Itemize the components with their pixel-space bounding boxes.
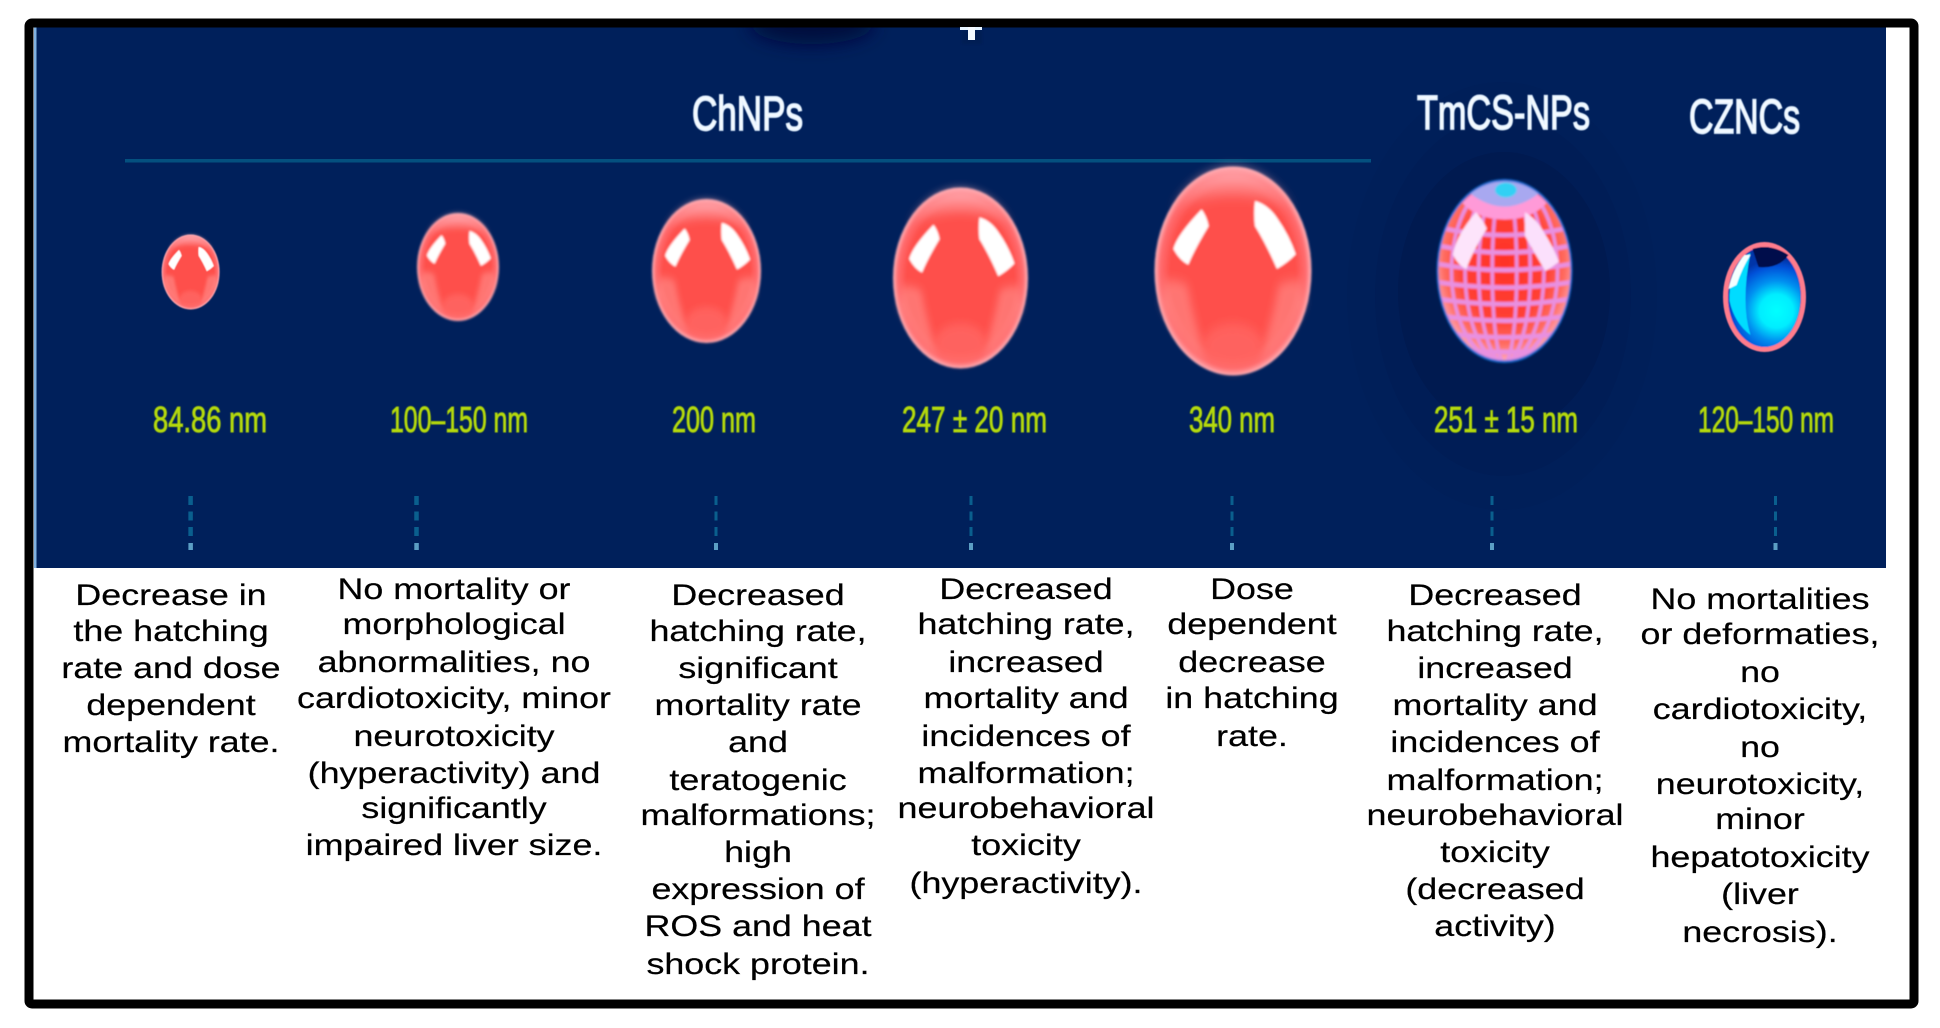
- size label: 100-150 nm: 100–150 nm: [390, 399, 528, 440]
- text: effects of 340 nm ChNPs: in hatching: [1165, 681, 1339, 714]
- text: effects of 84.86 nm ChNPs: [61, 578, 281, 758]
- text: effects of CZNCs: no: [1740, 655, 1780, 688]
- icon: core-shell nanoparticle CZNCs: [1726, 244, 1804, 350]
- text: effects of 100-150 nm ChNPs: neurotoxicity: [353, 719, 555, 752]
- text: effects of 100-150 nm ChNPs: (hyperactivity) and: [308, 756, 600, 789]
- text: effects of 247 nm ChNPs: [898, 572, 1154, 899]
- text: effects of TmCS-NPs: mortality and: [1392, 688, 1598, 721]
- text: effects of TmCS-NPs: increased: [1417, 651, 1573, 684]
- size label: 120-150 nm: 120–150 nm: [1698, 399, 1834, 440]
- text: effects of 100-150 nm ChNPs: abnormalities, no: [318, 645, 590, 678]
- text: effects of 340 nm ChNPs: Dose: [1210, 572, 1294, 605]
- size label: 84.86 nm: 84.86 nm: [153, 399, 267, 440]
- text: effects of CZNCs: no: [1740, 730, 1780, 763]
- text: effects of TmCS-NPs: incidences of: [1390, 725, 1601, 758]
- text: effects of 200 nm ChNPs: expression of: [651, 872, 866, 905]
- text: effects of 247 nm ChNPs: mortality and: [923, 681, 1129, 714]
- text: effects of 100-150 nm ChNPs: impaired liver size.: [306, 828, 602, 861]
- text: effects of 200 nm ChNPs: high: [724, 835, 792, 868]
- text: effects of 247 nm ChNPs: hatching rate,: [917, 607, 1135, 640]
- text: effects of 247 nm ChNPs: neurobehavioral: [898, 791, 1154, 824]
- text: effects of 247 nm ChNPs: toxicity: [971, 828, 1081, 861]
- icon: meshed nanoparticle TmCS-NPs: [1436, 179, 1572, 363]
- text: effects of 200 nm ChNPs: hatching rate,: [649, 614, 867, 647]
- text: effects of 200 nm ChNPs: significant: [678, 651, 838, 684]
- text: effects of TmCS-NPs: activity): [1434, 909, 1556, 942]
- text: effects of 200 nm ChNPs: Decreased: [671, 578, 845, 611]
- text: effects of 247 nm ChNPs: increased: [948, 645, 1104, 678]
- text: effects of CZNCs: neurotoxicity,: [1656, 767, 1864, 800]
- text: effects of CZNCs: hepatotoxicity: [1650, 840, 1870, 873]
- text: effects of 84.86 nm ChNPs: dependent: [86, 688, 256, 721]
- text: effects of CZNCs: or deformaties,: [1641, 617, 1879, 650]
- text: effects of 100-150 nm ChNPs: morphological: [342, 607, 566, 640]
- text: effects of 247 nm ChNPs: Decreased: [939, 572, 1113, 605]
- text: effects of 340 nm ChNPs: decrease: [1178, 645, 1326, 678]
- icon: red nanoparticle 84.86 nm: [162, 234, 220, 310]
- text: effects of CZNCs: [1641, 582, 1879, 948]
- size label: 251 ± 15 nm: 251 ± 15 nm: [1434, 399, 1578, 440]
- icon: red nanoparticle 200 nm: [652, 199, 761, 343]
- size label: 200 nm: 200 nm: [672, 399, 756, 440]
- text: effects of 200 nm ChNPs: mortality rate: [654, 688, 862, 721]
- text: effects of 340 nm ChNPs: dependent: [1167, 607, 1337, 640]
- icon: red nanoparticle 340 nm: [1154, 166, 1312, 376]
- text: effects of 200 nm ChNPs: teratogenic: [669, 763, 847, 796]
- text: effects of TmCS-NPs: Decreased: [1408, 578, 1582, 611]
- dotted connector lines: [188, 496, 1777, 550]
- text: effects of 100-150 nm ChNPs: significantly: [361, 791, 547, 824]
- heading: CZNCs: CZNCs: [1689, 91, 1800, 144]
- icon: red nanoparticle 247 nm: [893, 188, 1028, 368]
- text: effects of 340 nm ChNPs: rate.: [1216, 719, 1288, 752]
- text: effects of CZNCs: necrosis).: [1682, 915, 1838, 948]
- text: effects of TmCS-NPs: neurobehavioral: [1367, 798, 1623, 831]
- text: effects of 200 nm ChNPs: and: [728, 725, 788, 758]
- text: effects of 84.86 nm ChNPs: mortality rate.: [62, 725, 280, 758]
- size label: 247 ± 20 nm: 247 ± 20 nm: [902, 399, 1047, 440]
- heading: TmCS-NPs: TmCS-NPs: [1417, 87, 1590, 140]
- text: effects of 100-150 nm ChNPs: No mortality or: [338, 572, 571, 605]
- panel: navy nanoparticle band: [34, 4, 1886, 568]
- text: effects of TmCS-NPs: (decreased: [1405, 872, 1585, 905]
- text: effects of 84.86 nm ChNPs: rate and dose: [61, 651, 281, 684]
- heading: ChNPs: ChNPs: [692, 88, 803, 141]
- text: effects of 247 nm ChNPs: incidences of: [921, 719, 1132, 752]
- text: effects of TmCS-NPs: hatching rate,: [1386, 614, 1604, 647]
- text: effects of TmCS-NPs: [1367, 578, 1623, 942]
- text: effects of 84.86 nm ChNPs: Decrease in: [75, 578, 267, 611]
- size label: 340 nm: 340 nm: [1189, 399, 1275, 440]
- text: effects of CZNCs: No mortalities: [1650, 582, 1870, 615]
- text: effects of 100-150 nm ChNPs: [297, 572, 611, 861]
- text: effects of CZNCs: minor: [1715, 802, 1805, 835]
- ChNPs group divider line: [125, 159, 1371, 162]
- text: effects of TmCS-NPs: malformation;: [1386, 763, 1604, 796]
- text: effects of TmCS-NPs: toxicity: [1440, 835, 1550, 868]
- text: effects of 340 nm ChNPs: [1165, 572, 1339, 752]
- text: effects of 200 nm ChNPs: shock protein.: [646, 947, 870, 980]
- text: effects of 247 nm ChNPs: (hyperactivity).: [910, 866, 1142, 899]
- text: effects of CZNCs: cardiotoxicity,: [1653, 692, 1867, 725]
- icon: red nanoparticle 100-150 nm: [417, 213, 499, 321]
- text: effects of 247 nm ChNPs: malformation;: [917, 756, 1135, 789]
- text: effects of 200 nm ChNPs: malformations;: [641, 798, 875, 831]
- text: effects of 100-150 nm ChNPs: cardiotoxicity, minor: [297, 681, 611, 714]
- text: effects of 200 nm ChNPs: ROS and heat: [644, 909, 872, 942]
- icon: plus mark at top: [960, 27, 982, 44]
- text: effects of 200 nm ChNPs: [641, 578, 875, 980]
- text: effects of 84.86 nm ChNPs: the hatching: [73, 614, 269, 647]
- text: effects of CZNCs: (liver: [1721, 877, 1799, 910]
